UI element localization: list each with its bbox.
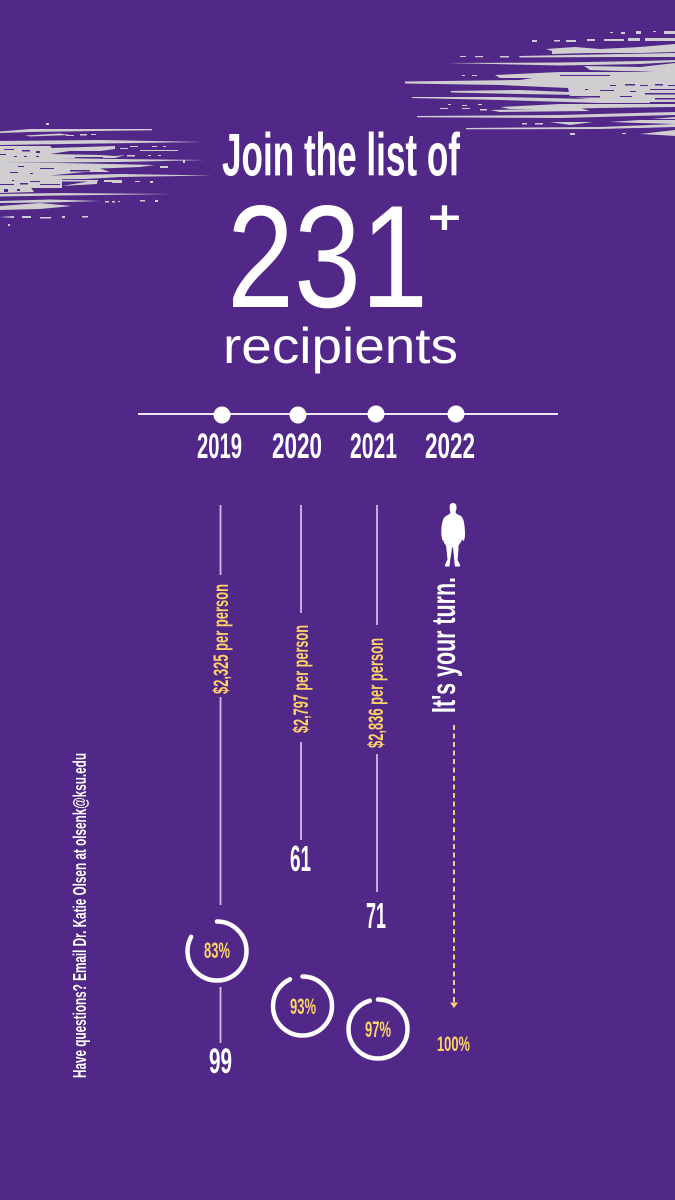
recipient count 61: 61 bbox=[290, 838, 311, 879]
timeline node: 2021 bbox=[368, 406, 384, 422]
subtitle: recipients: recipients bbox=[223, 318, 458, 374]
award amount 2020: $2,797 per person bbox=[290, 625, 313, 733]
timeline node: 2020 bbox=[290, 406, 306, 424]
ring label 97%: 97% bbox=[365, 1017, 391, 1042]
column: 2021: 71 bbox=[366, 895, 386, 936]
completion ring 93% bbox=[273, 976, 332, 1036]
column: 2022 bbox=[425, 503, 470, 1056]
icon: person silhouette bbox=[441, 503, 465, 566]
year labels: 2019 bbox=[197, 427, 242, 466]
timeline node: 2022 bbox=[448, 406, 464, 422]
timeline axis bbox=[138, 406, 558, 424]
completion ring 97% bbox=[348, 1000, 408, 1058]
timeline node: 2019 bbox=[214, 406, 230, 424]
big number: 231+: + bbox=[428, 192, 461, 245]
column: 2020 bbox=[273, 505, 332, 1036]
year labels: 2022 bbox=[425, 427, 475, 466]
year labels bbox=[197, 427, 475, 466]
completion ring 83% bbox=[188, 922, 246, 980]
brush stroke: top left bbox=[0, 123, 212, 226]
column: 2021 bbox=[348, 505, 408, 1058]
big number: 231+: 231 bbox=[227, 175, 428, 338]
call to action: It's your turn.: It's your turn. bbox=[425, 577, 462, 713]
title: Join the list of: Join the list of bbox=[222, 122, 461, 188]
award amount 2019: $2,325 per person bbox=[210, 584, 233, 694]
ring label 83%: 83% bbox=[204, 938, 230, 963]
award amount 2021: $2,836 per person bbox=[365, 638, 388, 748]
ring label 93%: 93% bbox=[290, 994, 316, 1019]
brush stroke: top right bbox=[405, 31, 675, 136]
year labels: 2021 bbox=[350, 427, 397, 466]
completion label 100%: 100% bbox=[437, 1033, 470, 1056]
year labels: 2020 bbox=[272, 427, 322, 466]
contact note: Have questions? Email Dr. Katie Olsen at olsenk@ksu.edu bbox=[70, 753, 90, 1078]
arrow: dashed bbox=[450, 725, 458, 1008]
column: 2019 bbox=[188, 505, 246, 1081]
recipient count 99: 99 bbox=[209, 1042, 232, 1081]
